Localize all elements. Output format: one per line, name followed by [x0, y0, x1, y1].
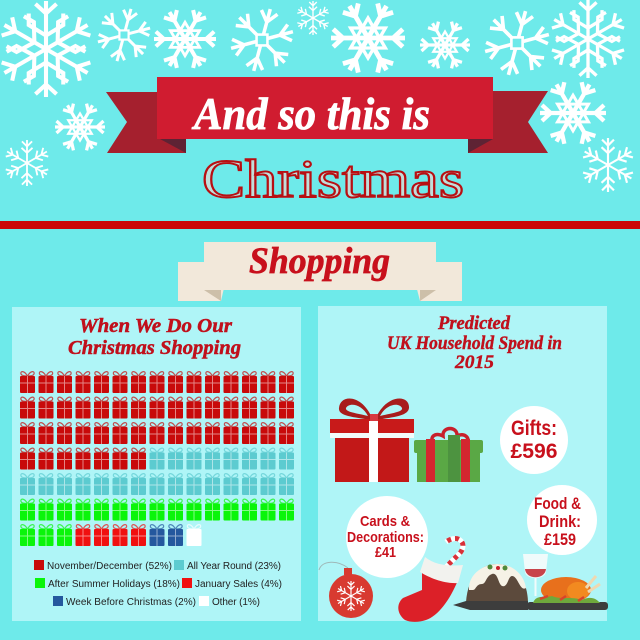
panel heading: Predicted: [437, 314, 511, 334]
panel heading: 2015: [454, 353, 494, 373]
panel heading: When We Do Our: [79, 315, 233, 337]
callout: gifts: [500, 406, 568, 474]
icon: christmas pudding: [453, 564, 528, 610]
callout: food and drink: [527, 485, 597, 555]
legend: January Sales (4%): [195, 579, 282, 590]
legend: After Summer Holidays (18%): [48, 579, 180, 590]
callout: cards and decorations: Cards &: [360, 513, 410, 530]
panel heading: [387, 314, 562, 373]
callout: gifts: Gifts:: [511, 417, 557, 440]
panel heading: UK Household Spend in: [387, 334, 562, 354]
legend: November/December (52%): [47, 561, 172, 572]
callout: cards and decorations: Decorations:: [347, 529, 424, 546]
snowflakes: [0, 0, 635, 192]
callout: cards and decorations: £41: [375, 544, 396, 561]
title line 2: Christmas: [202, 149, 464, 209]
icon: green gift: [414, 428, 483, 482]
panel heading: [68, 315, 241, 359]
callout: cards and decorations: [346, 496, 428, 578]
callout: gifts: £596: [510, 440, 558, 463]
legend: All Year Round (23%): [187, 561, 281, 572]
red divider: [0, 221, 640, 229]
panel: predicted household spend: [318, 306, 608, 622]
icon: wine glass: [523, 554, 548, 596]
title line 1: And so this is: [191, 88, 430, 139]
callout: food and drink: Drink:: [539, 512, 581, 531]
panel heading: Christmas Shopping: [68, 337, 241, 359]
legend: [34, 560, 282, 608]
legend: Week Before Christmas (2%): [66, 597, 196, 608]
legend: Other (1%): [212, 597, 260, 608]
title banner: [106, 77, 548, 153]
shopping banner: [178, 241, 462, 301]
icon: large red gift: [330, 399, 414, 482]
shopping heading: Shopping: [249, 241, 390, 282]
icon: roast turkey: [527, 576, 608, 610]
pictogram chart: [20, 372, 294, 546]
icon: stocking and candy cane: [398, 539, 463, 622]
icon: bauble: [319, 562, 373, 618]
callout: food and drink: Food &: [534, 494, 581, 513]
callout: food and drink: £159: [544, 530, 576, 549]
panel: when we do our christmas shopping: [12, 307, 301, 621]
